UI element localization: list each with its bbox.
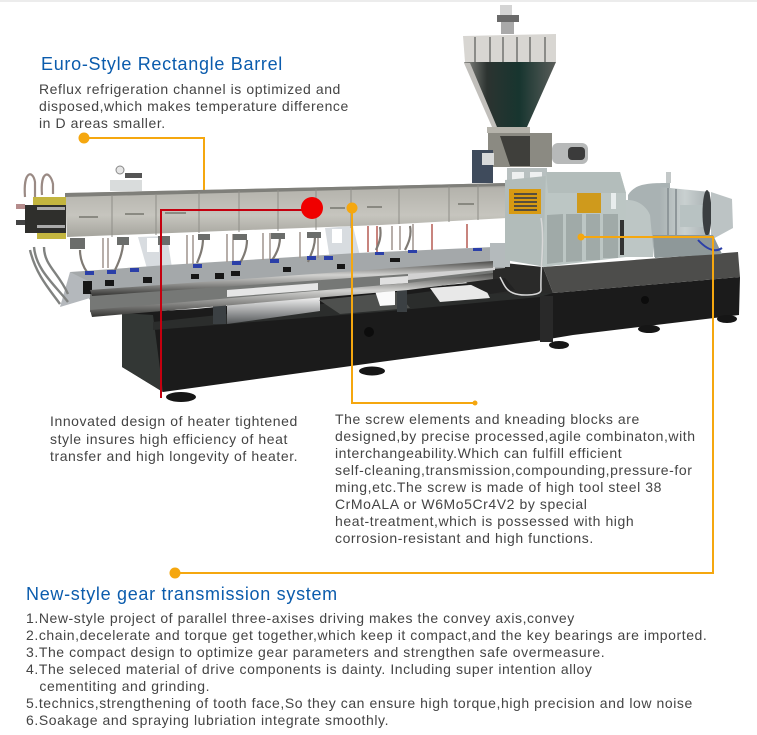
- text: screw description: corrosion-resistant and high functions.: [335, 530, 594, 546]
- heading: barrel: Euro-Style Rectangle Barrel: [41, 54, 283, 74]
- text: barrel description: in D areas smaller.: [39, 115, 166, 131]
- text: gear list: 5.technics,strengthening of tooth face,So they can ensure high torque,high precision and low noise: [26, 695, 693, 711]
- gearbox: [500, 172, 653, 295]
- top edge band: [0, 0, 757, 2]
- hopper: [463, 5, 588, 183]
- black clamps: [83, 258, 400, 294]
- leader: barrel: [84, 138, 204, 190]
- heading: gear: New-style gear transmission system: [26, 584, 338, 604]
- barrel: [65, 183, 507, 237]
- text: screw description: CrMoALA or W6Mo5Cr4V2 by special: [335, 496, 587, 512]
- machine base: [122, 252, 740, 402]
- heater boxes: [70, 232, 321, 249]
- water manifold and frame: [60, 243, 515, 312]
- text: barrel description: disposed,which makes temperature difference: [39, 98, 349, 114]
- die head: [16, 166, 142, 239]
- leader: heater: [161, 210, 312, 398]
- text: screw description: designed,by precise processed,agile combinaton,with: [335, 428, 696, 444]
- blue valves: [85, 248, 482, 275]
- text: screw description: ming,etc.The screw is made of high tool steel 38: [335, 479, 662, 495]
- text: gear list: 4.The seleced material of drive components is dainty. Including super intention alloy: [26, 661, 592, 677]
- motor: [628, 172, 733, 258]
- text: screw description: self-cleaning,transmission,compounding,pressure-for: [335, 462, 692, 478]
- white brackets: [138, 226, 360, 272]
- text: gear list: 6.Soakage and spraying lubriation integrate smoothly.: [26, 712, 389, 728]
- text: heater description: [50, 413, 298, 464]
- text: barrel description: [39, 81, 349, 131]
- heater wires: [30, 224, 467, 304]
- text: gear list: cementiting and grinding.: [39, 678, 210, 694]
- text: screw description: [335, 411, 696, 546]
- guide rods: [90, 261, 493, 317]
- text: heater description: Innovated design of heater tightened: [50, 413, 298, 429]
- text: gear list: [26, 610, 707, 728]
- text: gear list: 2.chain,decelerate and torque get together,which keep it compact,and the key bearings are imported.: [26, 627, 707, 643]
- text: gear list: 1.New-style project of parallel three-axises driving makes the convey axis,convey: [26, 610, 575, 626]
- text: screw description: interchangeability.Which can fulfill efficient: [335, 445, 622, 461]
- leader: screw: [352, 208, 475, 403]
- callout dots: [78, 132, 584, 578]
- text: heater description: transfer and high longevity of heater.: [50, 448, 298, 464]
- text: gear list: 3.The compact design to optimize gear parameters and strengthen safe overmeasure.: [26, 644, 605, 660]
- text: barrel description: Reflux refrigeration channel is optimized and: [39, 81, 341, 97]
- leader: gear: [175, 237, 713, 573]
- text: screw description: heat-treatment,which is possessed with high: [335, 513, 634, 529]
- text: screw description: The screw elements and kneading blocks are: [335, 411, 640, 427]
- text: heater description: style insures high efficiency of heat: [50, 431, 288, 447]
- callout lines: [84, 138, 713, 573]
